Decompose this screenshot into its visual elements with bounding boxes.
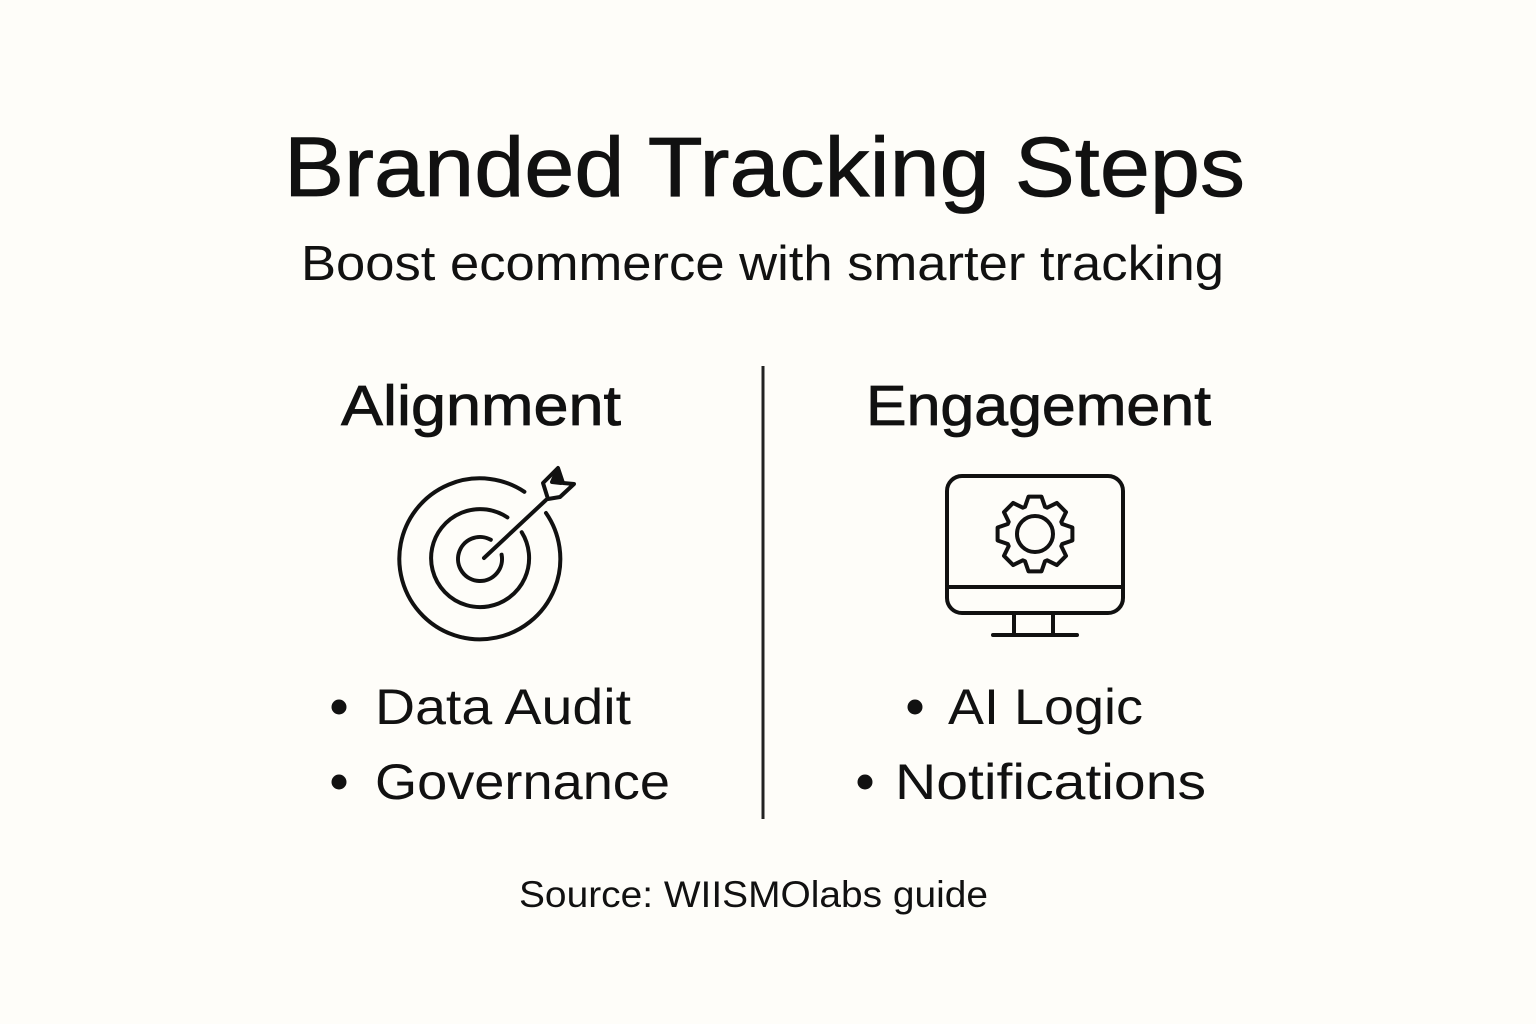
source note: Source: WIISMOlabs guide	[519, 874, 988, 915]
list: alignment items: Data Audit	[375, 679, 631, 735]
title: Branded Tracking Steps	[284, 120, 1245, 214]
icon: target with arrow	[399, 468, 574, 639]
panel: engagement	[858, 374, 1211, 810]
subtitle: Boost ecommerce with smarter tracking	[301, 237, 1224, 291]
list: alignment items	[332, 679, 670, 810]
heading: engagement: Engagement	[866, 374, 1211, 438]
list: engagement items	[858, 679, 1206, 810]
list: alignment items: Governance	[375, 754, 670, 810]
panel: alignment	[332, 374, 670, 810]
list: engagement items: Notifications	[895, 754, 1206, 810]
list: engagement items: AI Logic	[948, 679, 1143, 735]
icon: monitor with gear	[947, 476, 1123, 635]
heading: alignment: Alignment	[341, 374, 621, 438]
divider	[762, 366, 764, 819]
